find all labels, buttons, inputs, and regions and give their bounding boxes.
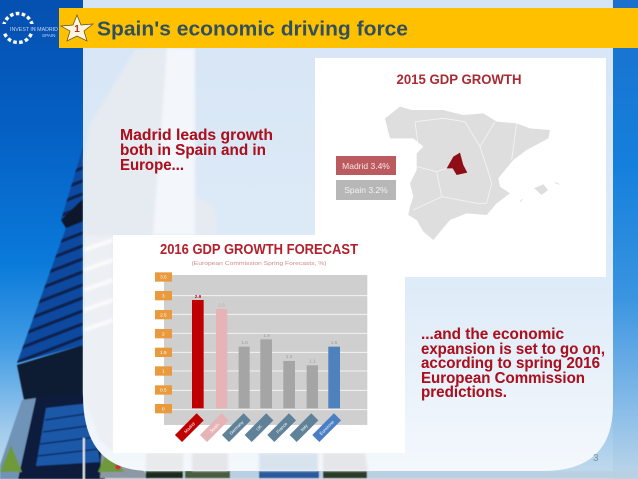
icon: star with number 1: 1 (74, 24, 80, 35)
legend: Spain: Spain 3.2% (344, 185, 388, 195)
text: economic expansion: according to spring 2016 (421, 355, 600, 372)
rotated category labels: Madrid (183, 421, 196, 434)
title: Spain's economic driving force (97, 18, 408, 40)
text: economic expansion: expansion is set to go on, (421, 341, 605, 358)
y-axis labels: 0 (162, 406, 165, 411)
rotated category labels: Eurozone (318, 419, 335, 436)
y-axis labels: 2 (162, 331, 165, 336)
y-axis labels: 2.5 (160, 312, 167, 317)
logo: Invest in Madrid (0, 14, 58, 42)
text: Madrid leads growth: Europe... (120, 157, 184, 174)
rotated category labels: UK (255, 424, 263, 432)
bar values: 1.6 (241, 340, 248, 345)
map heading: 2015 GDP GROWTH (396, 72, 522, 87)
text: Madrid leads growth: Madrid leads growth (120, 127, 273, 144)
text: economic expansion: European Commission (421, 370, 585, 387)
legend: Madrid: Madrid 3.4% (342, 161, 390, 171)
bar values: 1.9 (263, 333, 270, 338)
text: Madrid leads growth: both in Spain and in (120, 142, 266, 159)
y-axis labels: 1.5 (160, 350, 167, 355)
bar values (195, 294, 338, 363)
icon: star with number 1 (61, 15, 93, 41)
rotated category labels (175, 413, 341, 442)
panel: 2016 GDP growth forecast chart (113, 235, 405, 453)
rotated category labels: Germany (228, 419, 245, 436)
bar chart (155, 272, 367, 442)
y-axis labels: 3.5 (160, 275, 167, 280)
text: economic expansion (421, 326, 605, 401)
logo: Invest in Madrid: INVEST IN MADRID (10, 27, 58, 33)
y-axis labels: 1 (162, 369, 165, 374)
bar values: 2.9 (195, 294, 202, 299)
bar values: 1.6 (331, 340, 338, 345)
text: economic expansion: predictions. (421, 384, 507, 401)
y-axis labels: 3 (162, 293, 165, 298)
background: bottom strip (146, 471, 638, 478)
bars (192, 300, 340, 408)
rotated category labels: Italy (300, 423, 309, 432)
page number: 3 (593, 453, 599, 464)
text: Madrid leads growth (120, 127, 273, 174)
bar values: 1.3 (286, 354, 293, 359)
text: economic expansion: ...and the economic (421, 326, 564, 343)
bar values: 1.1 (309, 358, 316, 363)
Madrid region (447, 153, 467, 175)
panel: 2015 GDP growth map (315, 58, 606, 277)
logo: Invest in Madrid: SPAIN (42, 33, 55, 38)
chart subtitle: (European Commission Spring Forecasts, %) (192, 261, 327, 267)
chart heading: 2016 GDP GROWTH FORECAST (160, 242, 358, 258)
bar values: 2.6 (218, 302, 225, 307)
background: dark tower (0, 140, 150, 479)
map of Spain (385, 107, 559, 240)
ghost tower behind pane (84, 48, 368, 471)
y-axis labels (155, 272, 172, 413)
background: right sky strip (613, 0, 638, 479)
legend: Madrid (336, 156, 396, 175)
title bar (59, 8, 638, 48)
rotated category labels: France (275, 421, 289, 434)
y-axis labels: 0.5 (160, 388, 167, 393)
rotated category labels: Spain (209, 422, 221, 433)
legend: Spain (336, 180, 396, 200)
